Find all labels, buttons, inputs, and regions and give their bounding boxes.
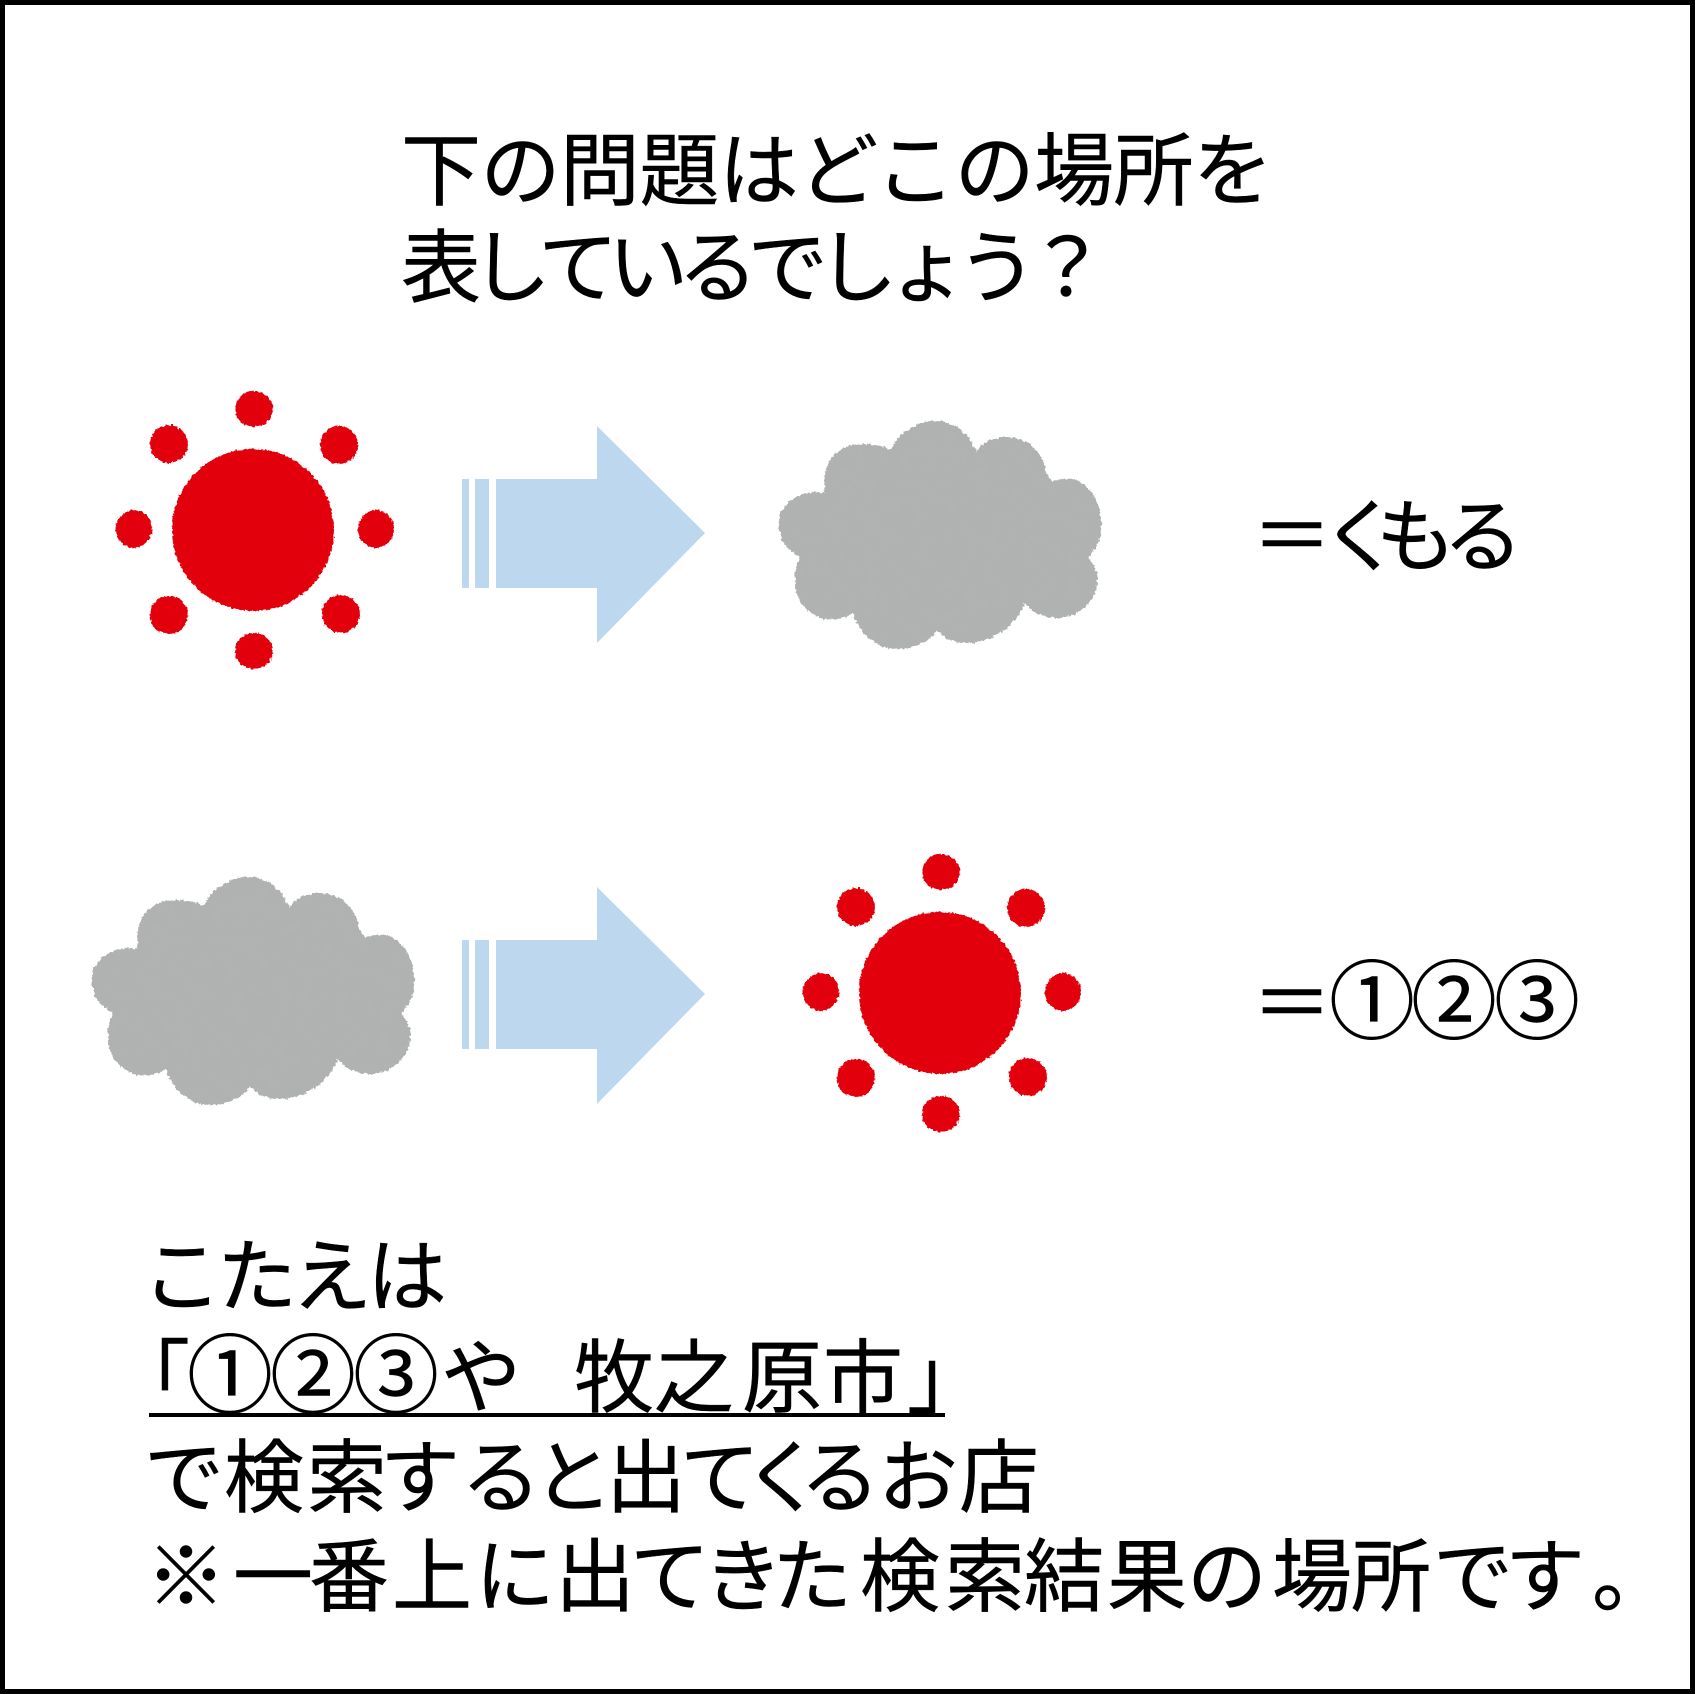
answer text: や 牧之原市」 [441,1334,987,1423]
underline [149,1413,945,1417]
icon: sun before [116,391,394,669]
icon: cloud after [779,421,1101,649]
answer text: ①②③ [187,1329,439,1425]
icon: sun after [803,854,1081,1132]
label: answer to solve: ①②③ [1329,955,1580,1051]
title: 表しているでしょう？ [401,224,1107,313]
answer text: こたえは [142,1233,447,1322]
label: becomes cloudy: ＝くもる [1252,493,1523,582]
title [401,127,1273,313]
title: 下の問題はどこの場所を [401,127,1273,216]
answer text: 「 [110,1334,190,1423]
icon: cloud before [92,877,414,1105]
answer text: ※一番上に出てきた検索結果の場所です。 [146,1533,1672,1622]
arrow: top [462,426,705,643]
answer text: で検索すると出てくるお店 [144,1434,1039,1523]
arrow: bottom [462,887,705,1104]
answer text [110,1233,1672,1622]
label: answer to solve: ＝ [1252,960,1332,1049]
